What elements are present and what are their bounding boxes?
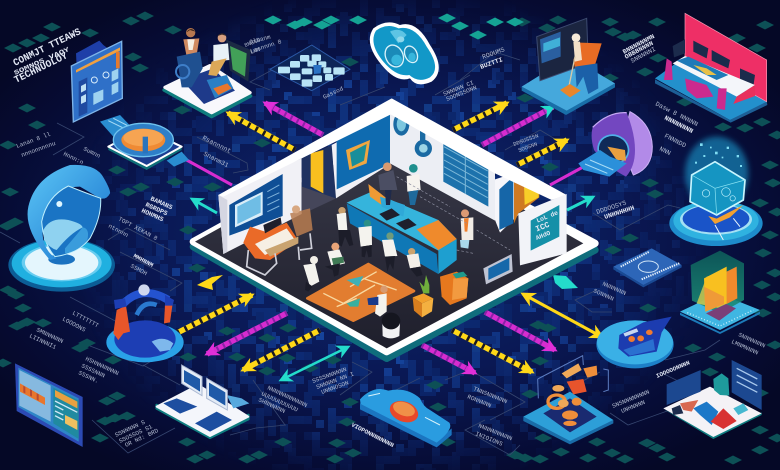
label: left middle <box>62 146 102 166</box>
label: top right bold: BNNNNNNMN <box>622 33 656 56</box>
label: center bottom right: UNNNOSON <box>320 379 350 396</box>
title: TECHNUOLOY <box>13 51 70 87</box>
front right wall block with sign: ICC <box>534 221 551 234</box>
label: bottom center right: TNNSNNNNNN <box>472 385 509 405</box>
icon: disc with shuttle <box>596 317 674 368</box>
label: bottom left <box>114 419 160 449</box>
label: far left <box>28 326 65 351</box>
monitor <box>537 18 588 81</box>
label: cube left: DDDOOSYS <box>595 200 627 216</box>
wall poster <box>337 113 390 189</box>
left workstation machine <box>243 205 313 275</box>
icon: stacked cube tray <box>270 45 350 91</box>
right screen <box>732 360 762 410</box>
keypad <box>195 412 232 432</box>
yellow doorway light <box>524 184 539 205</box>
icon: scanner machine <box>578 112 652 177</box>
label: upper right block: ROOUMS <box>481 46 506 61</box>
label: bold block: RGRDPS <box>144 201 169 217</box>
inner dome <box>43 219 83 250</box>
orange doorway <box>514 177 539 223</box>
map blob <box>693 402 718 425</box>
magenta chairs <box>664 58 727 110</box>
seated person 3 <box>382 232 397 272</box>
arrow: magenta upper left <box>265 103 323 135</box>
label: dolphin right: ntnnnn <box>107 223 130 239</box>
arrow: magenta line to dial <box>183 158 232 185</box>
label: upper right block: BUZTTI <box>479 56 504 71</box>
callout connector lines <box>0 52 720 455</box>
title <box>12 27 83 87</box>
label: far right: SNNNNNNN <box>737 331 767 350</box>
label: right upper: NNN <box>658 146 672 157</box>
label: left upper: nnnonnnnnu <box>20 140 57 159</box>
label: robot top: SSMOH <box>129 263 149 277</box>
worker with white coat left <box>303 256 319 292</box>
icon: chip card <box>613 248 682 287</box>
red block <box>711 408 737 429</box>
label: left middle: Sumnn <box>82 146 102 160</box>
arrow: yellow double lower left <box>177 295 252 333</box>
label: bold block: HOHMHS <box>140 207 165 223</box>
icon: red booth with table <box>655 13 767 123</box>
label: far right: LMNMNNNN <box>730 338 760 357</box>
monitor 1 <box>182 365 202 396</box>
label: bottom: NNNNNNNNNN <box>477 422 514 442</box>
label: robot top <box>129 253 155 277</box>
label: left upper: Lanan 8 ll <box>15 131 52 150</box>
label: right lower: SONNNN <box>592 287 615 303</box>
label: bold block: BAMANS <box>149 195 174 211</box>
monitor 1 screen <box>184 370 200 392</box>
glass frame <box>538 356 608 398</box>
icon: two people on white pad <box>164 28 251 117</box>
man <box>176 28 203 87</box>
label: far right <box>730 331 767 357</box>
laptop <box>368 184 387 208</box>
label: center bottom right: SNNNNN NN I <box>315 371 355 391</box>
window blinds <box>443 140 488 207</box>
arrow: yellow upper left <box>228 113 295 150</box>
label: far left: SMNNNNNN <box>35 326 65 345</box>
icon: dolphin shield on ring base <box>8 165 115 292</box>
green screen display <box>230 46 247 77</box>
label: center bottom left: SHNNNNNN <box>257 396 287 415</box>
arrow: yellow lower <box>243 330 320 370</box>
blue pads <box>163 398 197 414</box>
label: top right bold: OBBBNNNN <box>624 40 655 61</box>
label: center bottom right: SSSSNNNNNN <box>311 366 348 385</box>
label: cube left: UNHNHHHH <box>603 205 635 221</box>
label: bottom center right: RONNNNN <box>466 393 493 409</box>
label: left lower <box>77 355 120 385</box>
label: top right bold: SNNNNNI <box>630 46 657 65</box>
label: left upper <box>15 131 57 159</box>
monitor 2 <box>207 378 227 410</box>
wall icons <box>393 112 432 157</box>
front right wall block with sign: AHdO <box>535 230 552 242</box>
label: robot top: MMHNNM <box>132 253 155 269</box>
back left wall <box>218 113 390 254</box>
arrow set around the central platform <box>177 103 602 380</box>
wall tablet on floor <box>483 254 513 284</box>
worker seated with orange <box>325 243 345 277</box>
label: upper middle right: SOONSSONN <box>445 84 478 103</box>
label: bottom: INIOIONS <box>474 430 504 448</box>
label: bottom left: OR Nd: BRD <box>124 427 160 449</box>
label: right upper <box>654 101 699 157</box>
arrow: magenta with cyan head <box>482 107 553 145</box>
door panel <box>499 177 513 230</box>
label: arrow right: SOOSNN <box>517 141 538 154</box>
icon: tablet dashboard <box>71 41 122 122</box>
person on mat <box>367 286 388 317</box>
back right wall <box>390 112 539 233</box>
blue door <box>495 172 518 233</box>
person standing back left <box>378 162 397 205</box>
label: bold block <box>140 195 174 223</box>
label: dial callout: Rsannnnt <box>201 135 232 155</box>
person standing back right <box>407 164 421 205</box>
arrow: cyan right <box>567 197 593 210</box>
label: by green screen: 8NSNN <box>243 37 261 49</box>
seated person 4 <box>407 248 423 277</box>
label: right upper: NNNNNNNN <box>663 115 694 135</box>
icon: robot arm globe <box>106 284 184 362</box>
icon: map board <box>663 360 762 439</box>
label: dial callout: Snanm31 <box>202 151 230 169</box>
label: left middle: Hnnn:n <box>62 151 85 166</box>
front right wall block with sign: LoL de <box>535 209 559 225</box>
label: right upper: FNNNDD <box>663 133 687 149</box>
central isometric room <box>193 98 595 358</box>
hexagonal cube <box>690 162 745 215</box>
label: left lower: SSSNN. <box>77 369 100 385</box>
title: CONMJT TTEAWS <box>12 27 83 70</box>
icon: cloud logo <box>370 22 439 84</box>
label: center bottom left: NNNNNNNNNNNN <box>266 384 309 409</box>
arrow: magenta lower left <box>207 313 287 354</box>
keyboard 1 <box>379 208 400 221</box>
icon: dial device <box>100 115 189 170</box>
title: SOMNOS VAOY <box>13 46 71 77</box>
glass dome <box>42 186 101 257</box>
waste bin <box>382 313 400 338</box>
label: by green screen: LNN <box>249 46 261 56</box>
label: dolphin right: TOPT XEKAN 8 <box>117 216 159 242</box>
label: under tray: Gassod <box>322 85 345 101</box>
table <box>673 56 755 97</box>
label: top left of tray: OlDanm <box>249 33 272 46</box>
icon: info screen <box>15 363 83 447</box>
counter orange top <box>417 220 457 250</box>
plant in box <box>413 275 433 317</box>
glow <box>685 137 748 210</box>
seated person 1 <box>337 207 353 247</box>
woman <box>208 33 229 76</box>
label: bottom left: SSNNNNN S <box>114 419 147 439</box>
label: right lower <box>592 280 627 303</box>
seated person 2 <box>358 220 372 257</box>
arrow: yellow right <box>517 140 567 165</box>
front right wall block with sign <box>518 194 567 265</box>
label: center bottom right <box>311 366 355 396</box>
person at right <box>460 209 473 249</box>
label: arrow right: DDSUSSSN <box>512 132 539 148</box>
icon: glowing data cube <box>669 137 763 246</box>
floor marking trail <box>397 177 510 253</box>
icon: cloud slider button <box>360 389 452 447</box>
icon: glowing prism <box>680 251 760 334</box>
teal stack <box>713 373 729 396</box>
label: far left: LIINNNI1 <box>28 332 58 351</box>
orange tool <box>560 84 581 97</box>
pink wall <box>685 13 767 102</box>
white top edge of walls <box>218 98 567 200</box>
orange boxes <box>440 272 468 305</box>
orange support <box>708 205 743 224</box>
label: right upper: Dasw 8 NNNNN <box>654 101 699 128</box>
label: cube left <box>595 200 635 221</box>
label: bottom left: SSOSSOS S1 <box>118 423 154 445</box>
label: center bottom left: UUUUUUUUUUU <box>260 390 299 414</box>
orange floor mat with plan <box>307 264 414 321</box>
label: robot left: LOOOONS <box>61 316 87 334</box>
label: map bold: IOOOOONNNN <box>655 359 691 380</box>
icon: worker at monitor <box>522 18 615 115</box>
label: left lower: HSHNNNNNNN <box>84 355 120 377</box>
ring base <box>8 238 115 292</box>
label: robot left <box>61 310 100 334</box>
label: right lower: NNNNNNN <box>601 280 627 297</box>
green screen <box>226 39 251 82</box>
label: top right bold <box>622 33 657 65</box>
monitor 2 screen <box>209 383 225 406</box>
keyboard 2 <box>396 218 417 230</box>
arrow: cyan left <box>192 199 217 213</box>
label: left lower: SSSSNNN <box>80 362 106 380</box>
people at the counter <box>303 162 473 292</box>
label: under cloud slider: VIOPONNNNNNNN <box>350 422 395 449</box>
wall panel with screen <box>229 174 283 236</box>
arrow: magenta bottom <box>422 345 475 373</box>
arrow: yellow double right <box>523 294 602 337</box>
icon: workstation pad <box>157 365 249 438</box>
monitor screen <box>540 32 561 63</box>
label: blocks right: SNSNNNNNNNN <box>611 388 651 410</box>
arrow: yellow upper right <box>453 103 507 130</box>
icon: orange blocks platform <box>523 356 613 444</box>
particles <box>695 143 742 167</box>
label: upper right block <box>479 46 506 71</box>
platform base <box>193 133 595 358</box>
orange shapes <box>548 363 597 426</box>
label: by green screen <box>243 37 261 56</box>
label: blocks right: UNHNNNN <box>620 399 646 415</box>
arrow: yellow lower right <box>452 330 532 372</box>
label: dial callout <box>201 135 232 169</box>
counter screens <box>380 197 405 217</box>
left screen <box>667 370 701 405</box>
shell <box>28 165 110 260</box>
person <box>568 33 602 94</box>
arrow: small yellow head <box>197 275 223 290</box>
central counter <box>347 184 457 274</box>
arrow: magenta lower right <box>485 312 555 350</box>
arrow: magenta line to scanner <box>550 167 583 185</box>
label: center bottom left <box>257 384 309 415</box>
arrow: cyan double lower <box>281 347 348 380</box>
arrow: cyan lower right <box>553 275 578 289</box>
small screens <box>673 39 755 87</box>
label: robot left: LTTTTTTT <box>71 310 100 329</box>
label: top left of tray: Lasnnnn 8 <box>249 38 283 55</box>
label: upper middle right: SNNNNN CI <box>442 79 475 98</box>
